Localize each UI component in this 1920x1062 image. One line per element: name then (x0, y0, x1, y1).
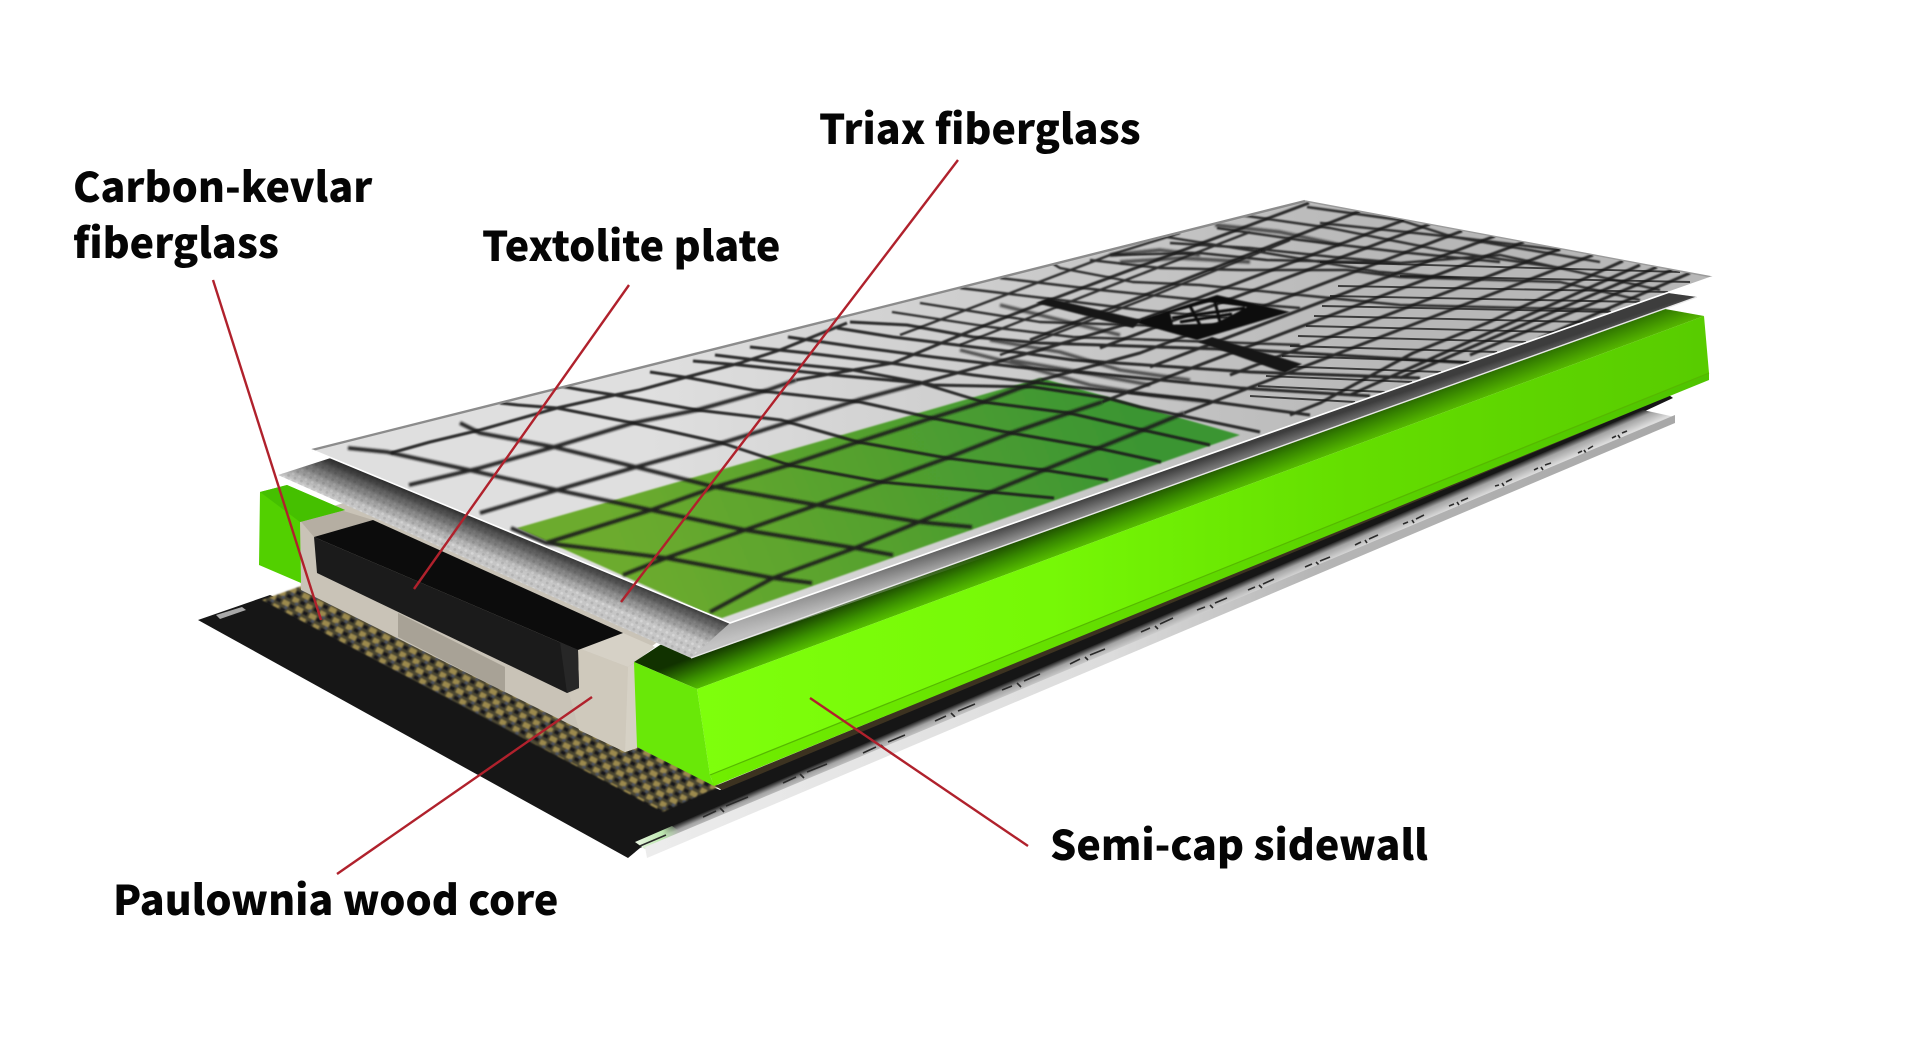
base layer: black sheet (198, 395, 1673, 858)
emblem upper bar (1036, 298, 1142, 328)
semi-cap sidewall (634, 309, 1709, 786)
plate front (314, 537, 579, 693)
sheet surface (312, 201, 1712, 623)
label: semi-cap sidewall: Semi-cap sidewall (1050, 812, 1428, 872)
emblem on sheet (1036, 295, 1302, 373)
sidewall front face (634, 662, 714, 786)
emblem lower bar (1198, 337, 1302, 373)
sidewall flange (710, 373, 1709, 786)
leader line: triax fiberglass (621, 160, 958, 602)
core body (297, 480, 660, 752)
smudged print lines (960, 225, 1340, 402)
small silver edge behind sheet (216, 607, 246, 619)
core right block front (569, 648, 628, 752)
wood core (297, 480, 660, 752)
core left top (297, 508, 373, 537)
sidewall side face (697, 316, 1709, 775)
grid lines on sheet (348, 203, 1690, 612)
rear sidewall (259, 485, 345, 583)
leader line: textolite plate (414, 285, 629, 589)
label: carbon-kevlar fiberglass: fiberglass (73, 210, 279, 270)
carbon layer thin edge along sidewall (715, 395, 1667, 790)
gray edge tape (635, 410, 1675, 849)
leader line: carbon-kevlar fiberglass (213, 280, 321, 620)
leader line: semi-cap sidewall (810, 698, 1028, 846)
green print on sheet (517, 378, 1240, 618)
leader line: paulownia wood core (337, 697, 592, 874)
sheet rim (312, 201, 1305, 450)
emblem inner strokes (1172, 302, 1245, 325)
core shaded joint (398, 613, 505, 692)
tape start tint (635, 826, 682, 849)
core right block side (625, 662, 637, 752)
underlayer shadow (284, 458, 729, 643)
textolite plate (314, 520, 623, 693)
carbon-kevlar fiberglass layer (262, 586, 720, 812)
top fiberglass sheet (312, 201, 1712, 623)
underlayer weave (278, 293, 1697, 658)
dense hatch lines (1250, 262, 1690, 402)
plate end (560, 642, 579, 693)
plate top (314, 520, 623, 650)
label: triax fiberglass: Triax fiberglass (819, 96, 1141, 156)
triax underlayer sheet (278, 293, 1697, 658)
sidewall top face (634, 309, 1704, 689)
underlayer long band (691, 293, 1697, 658)
edge tape tick marks (640, 431, 1627, 846)
label: paulownia wood core: Paulownia wood core (113, 867, 558, 927)
label: carbon-kevlar fiberglass: Carbon-kevlar (73, 154, 372, 214)
ski layers illustration (198, 201, 1712, 858)
white edge strip (645, 415, 1675, 858)
core right block top (578, 633, 655, 667)
label: textolite plate: Textolite plate (482, 213, 780, 273)
